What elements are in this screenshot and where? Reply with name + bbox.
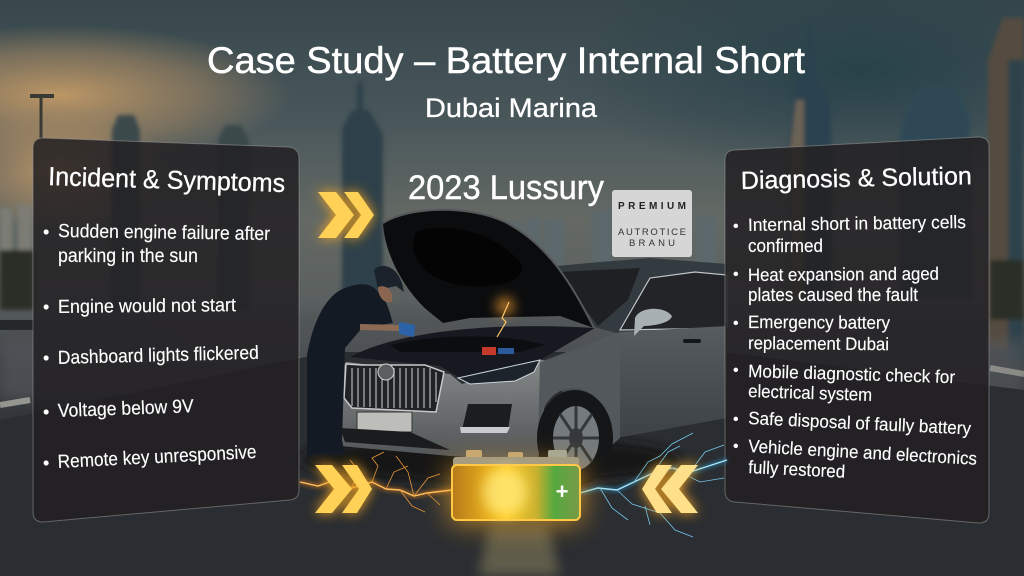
bullet list bbox=[733, 212, 978, 482]
wheel bbox=[537, 390, 613, 486]
bullet list: • bbox=[733, 218, 739, 235]
bullet list: Engine would not start bbox=[58, 295, 237, 318]
lower intake bbox=[340, 428, 450, 450]
bonnet and engine bay bbox=[350, 326, 595, 378]
grille bbox=[344, 364, 444, 412]
bullet list: electrical system bbox=[748, 381, 872, 405]
mechanic bbox=[307, 266, 415, 455]
bullet list: • bbox=[733, 438, 739, 455]
bullet list: • bbox=[43, 453, 49, 473]
battery bbox=[450, 450, 582, 523]
bullet list: • bbox=[733, 362, 739, 379]
arrow: top left chevrons bbox=[318, 192, 374, 238]
bullet list: Emergency battery bbox=[748, 312, 890, 333]
arrow: bottom left chevrons bbox=[315, 465, 372, 513]
bullet list bbox=[43, 221, 271, 473]
vehicle heading: 2023 Lussury bbox=[408, 169, 604, 207]
license plate bbox=[357, 412, 412, 432]
heading: Diagnosis & Solution bbox=[741, 162, 972, 195]
mirror bbox=[634, 309, 672, 336]
bullet list: Safe disposal of faully battery bbox=[748, 408, 972, 439]
bullet list: • bbox=[43, 348, 49, 368]
arrow: bottom right chevrons bbox=[642, 465, 698, 513]
bullet list: • bbox=[43, 297, 49, 317]
bullet list: • bbox=[733, 266, 739, 283]
badge: premium brand: BRANU bbox=[629, 238, 675, 249]
bullet list: confirmed bbox=[748, 236, 823, 256]
fender and wheel arch bbox=[538, 334, 620, 445]
bullet list: Vehicle engine and electronics bbox=[748, 436, 978, 469]
lightning: blue right bbox=[580, 433, 727, 537]
heading: Incident & Symptoms bbox=[48, 161, 286, 198]
spark under hood bbox=[496, 297, 514, 337]
bullet list: • bbox=[733, 315, 739, 332]
bullet list: Remote key unresponsive bbox=[57, 442, 257, 473]
front bumper bbox=[333, 360, 570, 462]
badge: premium brand bbox=[612, 190, 692, 257]
bullet list: • bbox=[43, 402, 49, 422]
bullet list: • bbox=[43, 222, 49, 242]
bullet list: Mobile diagnostic check for bbox=[748, 361, 955, 387]
panel: incident and symptoms bbox=[33, 138, 299, 522]
lightning: orange left bbox=[300, 452, 452, 512]
bullet list: Sudden engine failure after bbox=[58, 221, 271, 245]
car with open hood bbox=[333, 210, 727, 486]
bullet list: Internal short in battery cells bbox=[748, 212, 966, 235]
badge: premium brand: AUTROTICE bbox=[618, 227, 686, 238]
bullet list: fully restored bbox=[748, 457, 846, 482]
title: Case Study – Battery Internal Short bbox=[207, 40, 806, 81]
bullet list: plates caused the fault bbox=[748, 285, 918, 305]
bullet list: parking in the sun bbox=[58, 246, 198, 267]
battery: + bbox=[556, 479, 568, 504]
bullet list: Voltage below 9V bbox=[57, 396, 194, 422]
badge: premium brand: PREMIUM bbox=[618, 201, 686, 212]
bullet list: replacement Dubai bbox=[748, 333, 889, 354]
bullet list: • bbox=[733, 411, 739, 428]
bullet list: Heat expansion and aged bbox=[748, 264, 939, 285]
hood bbox=[383, 210, 594, 328]
panel: diagnosis and solution bbox=[725, 137, 989, 523]
subtitle: Dubai Marina bbox=[425, 93, 598, 123]
bullet list: Dashboard lights flickered bbox=[58, 343, 259, 369]
headlight bbox=[458, 360, 540, 384]
